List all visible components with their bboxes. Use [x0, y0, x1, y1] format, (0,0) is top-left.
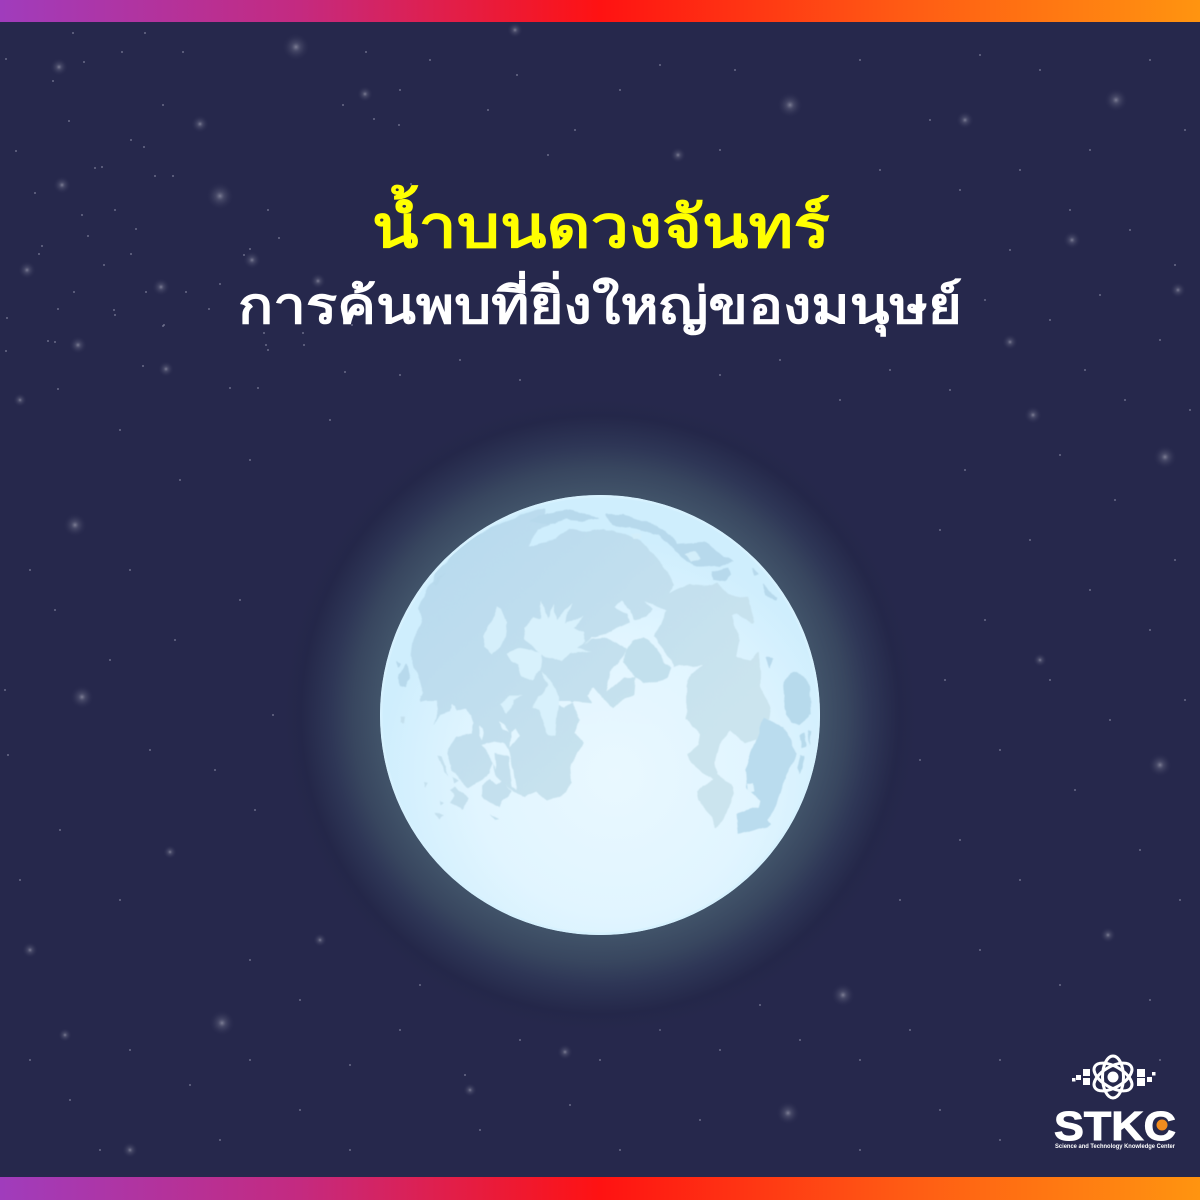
data squares — [1072, 1069, 1156, 1086]
central highlands — [572, 600, 702, 720]
light channels — [478, 722, 519, 790]
upper highlands and crater — [483, 533, 811, 725]
moon — [380, 495, 820, 935]
title: น้ำบนดวงจันทร์ — [372, 185, 830, 260]
main mare — [412, 509, 770, 718]
eastern mare — [687, 718, 762, 828]
western maria and channels — [400, 648, 583, 820]
top gradient bar — [0, 0, 1200, 22]
moon glow — [275, 390, 925, 1040]
orange dot — [1156, 1120, 1168, 1130]
Fecunditatis — [737, 717, 797, 835]
highland islands — [633, 538, 700, 562]
small eastern maria — [397, 568, 777, 687]
Copernicus crater with rays — [523, 600, 592, 662]
subtitle: การค้นพบที่ยิ่งใหญ่ของมนุษย์ — [238, 271, 962, 337]
limb patches — [787, 714, 812, 774]
maria, lower east — [682, 708, 812, 835]
Kepler patch — [483, 607, 507, 653]
atom icon — [1090, 1056, 1136, 1098]
lunar surface features — [397, 509, 812, 835]
dark mare lobe — [625, 638, 670, 682]
limb rim — [381, 496, 819, 934]
island in eastern mare — [746, 783, 754, 792]
logo caption: Science and Technology Knowledge Center — [1055, 1144, 1176, 1150]
Crisium — [783, 672, 811, 715]
Carpathian highlands and rays — [500, 648, 560, 737]
maria and highlands, upper half — [397, 509, 777, 718]
STKC wordmark: STKC — [1054, 1103, 1176, 1149]
north band — [530, 510, 733, 567]
western and Nubium maria — [434, 700, 584, 800]
south-western small maria — [400, 717, 512, 820]
STKC logo — [1054, 1056, 1176, 1150]
bottom gradient bar — [0, 1177, 1200, 1200]
moon disc — [380, 495, 820, 935]
